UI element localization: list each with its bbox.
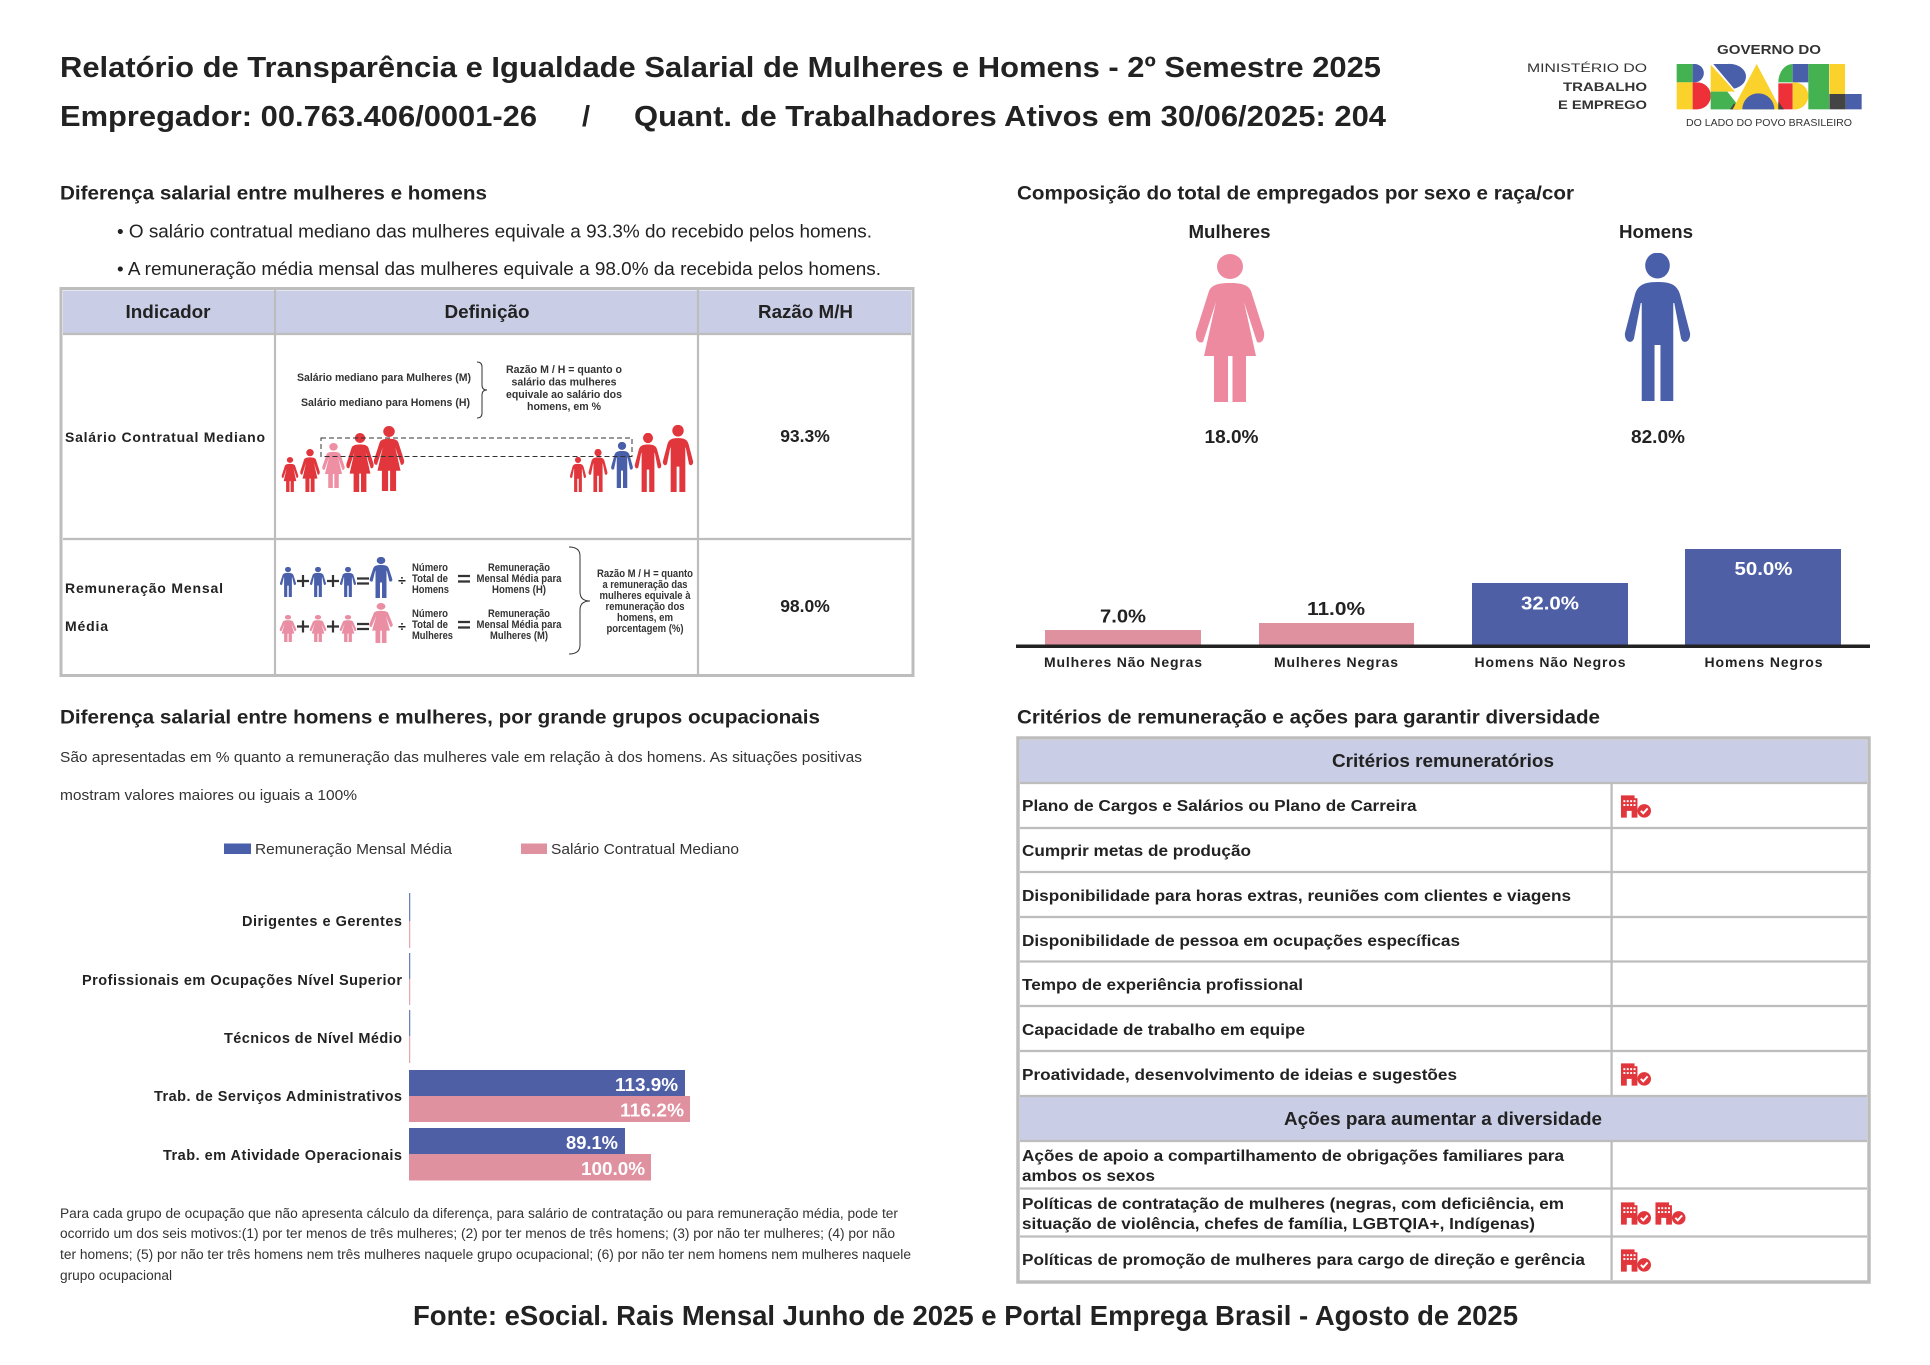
- legend: Remuneração Mensal Média: [255, 841, 453, 858]
- bar chart: grupos ocupacionais: 89.1%: [566, 1133, 618, 1153]
- bar chart: sexo e raça/cor: 32.0%: [1521, 594, 1579, 614]
- bar chart: sexo e raça/cor: 50.0%: [1734, 559, 1792, 579]
- table: critérios e ações: Disponibilidade para horas extras, reuniões com clientes e viagens: [1022, 888, 1571, 905]
- table: indicadores: Remuneração Mensal: [65, 580, 223, 596]
- diagram: remuneração média: Razão M / H = quanto: [597, 568, 693, 580]
- bar chart: grupos ocupacionais: 100.0%: [581, 1159, 645, 1179]
- title: Relatório de Transparência e Igualdade Salarial de Mulheres e Homens - 2º Semestre 2025: [60, 52, 1381, 84]
- bar chart: grupos ocupacionais: Trab. de Serviços Administrativos: [154, 1089, 402, 1105]
- panel: diferença salarial: [60, 182, 913, 676]
- label: mulheres: Mulheres: [1188, 222, 1270, 242]
- bar chart: sexo e raça/cor: Mulheres Negras: [1274, 654, 1398, 670]
- title: Quant. de Trabalhadores Ativos em 30/06/2025: 204: [634, 101, 1386, 133]
- heading: composição: Composição do total de empregados por sexo e raça/cor: [1017, 182, 1574, 204]
- table: critérios e ações: Políticas de promoção de mulheres para cargo de direção e gerência: [1022, 1252, 1585, 1269]
- diagram: remuneração média: Total de: [412, 573, 448, 585]
- table: critérios e ações: ambos os sexos: [1022, 1168, 1155, 1185]
- diagram: remuneração média: a remuneração das: [602, 579, 688, 591]
- value: homens 82%: 82.0%: [1631, 427, 1685, 447]
- table: indicadores: [61, 288, 913, 676]
- table: indicadores: Razão M/H: [758, 302, 853, 322]
- diagram: salário mediano: equivale ao salário dos: [506, 389, 622, 401]
- table: critérios e ações: Critérios remuneratórios: [1332, 751, 1554, 771]
- bar chart: sexo e raça/cor: 7.0%: [1100, 606, 1146, 626]
- text: bullet remuneração média: • A remuneração média mensal das mulheres equivale a 98.0% da recebida pelos homens.: [117, 259, 881, 279]
- icon: mulher: [1196, 254, 1264, 402]
- diagram: salário mediano: Razão M / H = quanto o: [506, 364, 622, 376]
- diagram: salário mediano: Salário mediano para Mulheres (M): [297, 372, 471, 384]
- table: critérios e ações: Plano de Cargos e Salários ou Plano de Carreira: [1022, 798, 1417, 815]
- diagram: salário mediano: Salário mediano para Homens (H): [301, 397, 470, 409]
- table: indicadores: 93.3%: [780, 426, 830, 446]
- table: indicadores: Salário Contratual Mediano: [65, 429, 265, 445]
- diagram: remuneração média: mulheres equivale à: [600, 590, 691, 602]
- logo: ministério e governo do Brasil: DO LADO DO POVO BRASILEIRO: [1686, 118, 1852, 129]
- legend: [224, 841, 739, 858]
- table: critérios e ações: Tempo de experiência profissional: [1022, 977, 1303, 994]
- logo: ministério e governo do Brasil: TRABALHO: [1563, 80, 1647, 94]
- title: /: [582, 101, 590, 133]
- table: critérios e ações: Disponibilidade de pessoa em ocupações específicas: [1022, 933, 1460, 950]
- table: critérios e ações: Ações de apoio a compartilhamento de obrigações familiares para: [1022, 1148, 1564, 1165]
- bar chart: grupos ocupacionais: Dirigentes e Gerentes: [242, 914, 402, 930]
- table: critérios e ações: situação de violência, chefes de família, LGBTQIA+, Indígenas): [1022, 1216, 1535, 1233]
- diagram: remuneração média: ÷: [398, 618, 406, 634]
- text: bullet salário contratual: • O salário contratual mediano das mulheres equivale a 93.3% do recebido pelos homens.: [117, 222, 872, 242]
- diagram: salário mediano: salário das mulheres: [512, 376, 616, 388]
- label: homens: Homens: [1619, 222, 1693, 242]
- panel: critérios de remuneração: [1017, 706, 1869, 1282]
- text: nota de rodapé: ter homens; (5) por não ter três homens nem três mulheres naquele grupo ocupacional; (6) por não ter nem homens nem mulheres naquele: [60, 1247, 911, 1262]
- panel: composição dos empregados: [1016, 182, 1870, 670]
- table: indicadores: Média: [65, 618, 108, 634]
- diagram: remuneração média: Mulheres: [412, 630, 453, 642]
- diagram: remuneração média: [280, 547, 693, 654]
- diagram: remuneração média: Remuneração: [488, 608, 550, 620]
- diagram: remuneração média: Mensal Média para: [476, 573, 562, 585]
- table: indicadores: Indicador: [126, 302, 210, 322]
- bar chart: sexo e raça/cor: Homens Não Negros: [1474, 654, 1626, 670]
- diagram: remuneração média: Remuneração: [488, 562, 550, 574]
- bar chart: sexo e raça/cor: 11.0%: [1307, 598, 1365, 619]
- table: critérios e ações: [1018, 738, 1869, 1282]
- heading: grupos ocupacionais: Diferença salarial entre homens e mulheres, por grande grupos ocupacionais: [60, 706, 820, 728]
- table: critérios e ações: Políticas de contratação de mulheres (negras, com deficiência, em: [1022, 1196, 1564, 1213]
- icon: homem: [1625, 252, 1690, 401]
- diagram: remuneração média: Total de: [412, 619, 448, 631]
- table: critérios e ações: Cumprir metas de produção: [1022, 843, 1251, 860]
- bar chart: grupos ocupacionais: Profissionais em Ocupações Nível Superior: [82, 973, 402, 989]
- bar chart: sexo e raça/cor: [1016, 549, 1870, 670]
- source footer: Fonte: eSocial. Rais Mensal Junho de 2025 e Portal Emprega Brasil - Agosto de 2025: [413, 1300, 1518, 1331]
- diagram: salário mediano: [282, 362, 693, 492]
- diagram: remuneração média: remuneração dos: [606, 601, 684, 613]
- bar chart: sexo e raça/cor: Mulheres Não Negras: [1044, 654, 1202, 670]
- text: explicação: mostram valores maiores ou iguais a 100%: [60, 787, 357, 804]
- diagram: remuneração média: Número: [412, 562, 448, 574]
- diagram: remuneração média: Homens: [412, 584, 449, 596]
- diagram: remuneração média: ÷: [398, 572, 406, 588]
- diagram: remuneração média: Homens (H): [492, 584, 546, 596]
- table: critérios e ações: Proatividade, desenvolvimento de ideias e sugestões: [1022, 1067, 1457, 1084]
- bar chart: grupos ocupacionais: Trab. em Atividade Operacionais: [163, 1148, 402, 1164]
- value: mulheres 18%: 18.0%: [1204, 427, 1258, 447]
- diagram: remuneração média: Mulheres (M): [490, 630, 548, 642]
- logo: ministério e governo do Brasil: MINISTÉRIO DO: [1527, 60, 1647, 75]
- text: explicação: São apresentadas em % quanto a remuneração das mulheres vale em relação à dos homens. As situações positivas: [60, 749, 862, 766]
- diagram: remuneração média: homens, em: [617, 612, 673, 624]
- bar chart: grupos ocupacionais: [82, 893, 690, 1180]
- bar chart: grupos ocupacionais: 116.2%: [620, 1100, 684, 1120]
- diagram: remuneração média: Mensal Média para: [476, 619, 562, 631]
- text: nota de rodapé: [60, 1206, 911, 1283]
- legend: Salário Contratual Mediano: [551, 841, 739, 858]
- logo: ministério e governo do Brasil: E EMPREGO: [1558, 98, 1647, 112]
- table: critérios e ações: Ações para aumentar a diversidade: [1284, 1109, 1602, 1129]
- bar chart: sexo e raça/cor: Homens Negros: [1704, 654, 1823, 670]
- title: Empregador: 00.763.406/0001-26: [60, 101, 537, 133]
- text: nota de rodapé: Para cada grupo de ocupação que não apresenta cálculo da diferença, para salário de contratação ou para remuneração média, pode ter: [60, 1206, 899, 1221]
- bar chart: grupos ocupacionais: Técnicos de Nível Médio: [224, 1031, 402, 1047]
- table: indicadores: 98.0%: [780, 596, 830, 616]
- diagram: salário mediano: homens, em %: [527, 401, 601, 413]
- text: explicação: [60, 749, 862, 804]
- bar chart: grupos ocupacionais: 113.9%: [615, 1075, 678, 1095]
- heading: critérios: Critérios de remuneração e ações para garantir diversidade: [1017, 706, 1600, 728]
- logo: ministério e governo do Brasil: [1527, 42, 1862, 129]
- text: nota de rodapé: ocorrido um dos seis motivos:(1) por ter menos de três mulheres; (2) por ter menos de três homens; (3) por não ter mulheres; (4) por não: [60, 1226, 895, 1241]
- text: nota de rodapé: grupo ocupacional: [60, 1268, 172, 1283]
- title: [60, 52, 1386, 133]
- diagram: remuneração média: porcentagem (%): [606, 623, 684, 635]
- panel: grupos ocupacionais: [60, 706, 911, 1283]
- heading: diferença salarial: Diferença salarial entre mulheres e homens: [60, 182, 487, 204]
- table: indicadores: Definição: [444, 302, 530, 322]
- logo: ministério e governo do Brasil: GOVERNO DO: [1717, 42, 1821, 57]
- table: critérios e ações: Capacidade de trabalho em equipe: [1022, 1022, 1305, 1039]
- diagram: remuneração média: Número: [412, 608, 448, 620]
